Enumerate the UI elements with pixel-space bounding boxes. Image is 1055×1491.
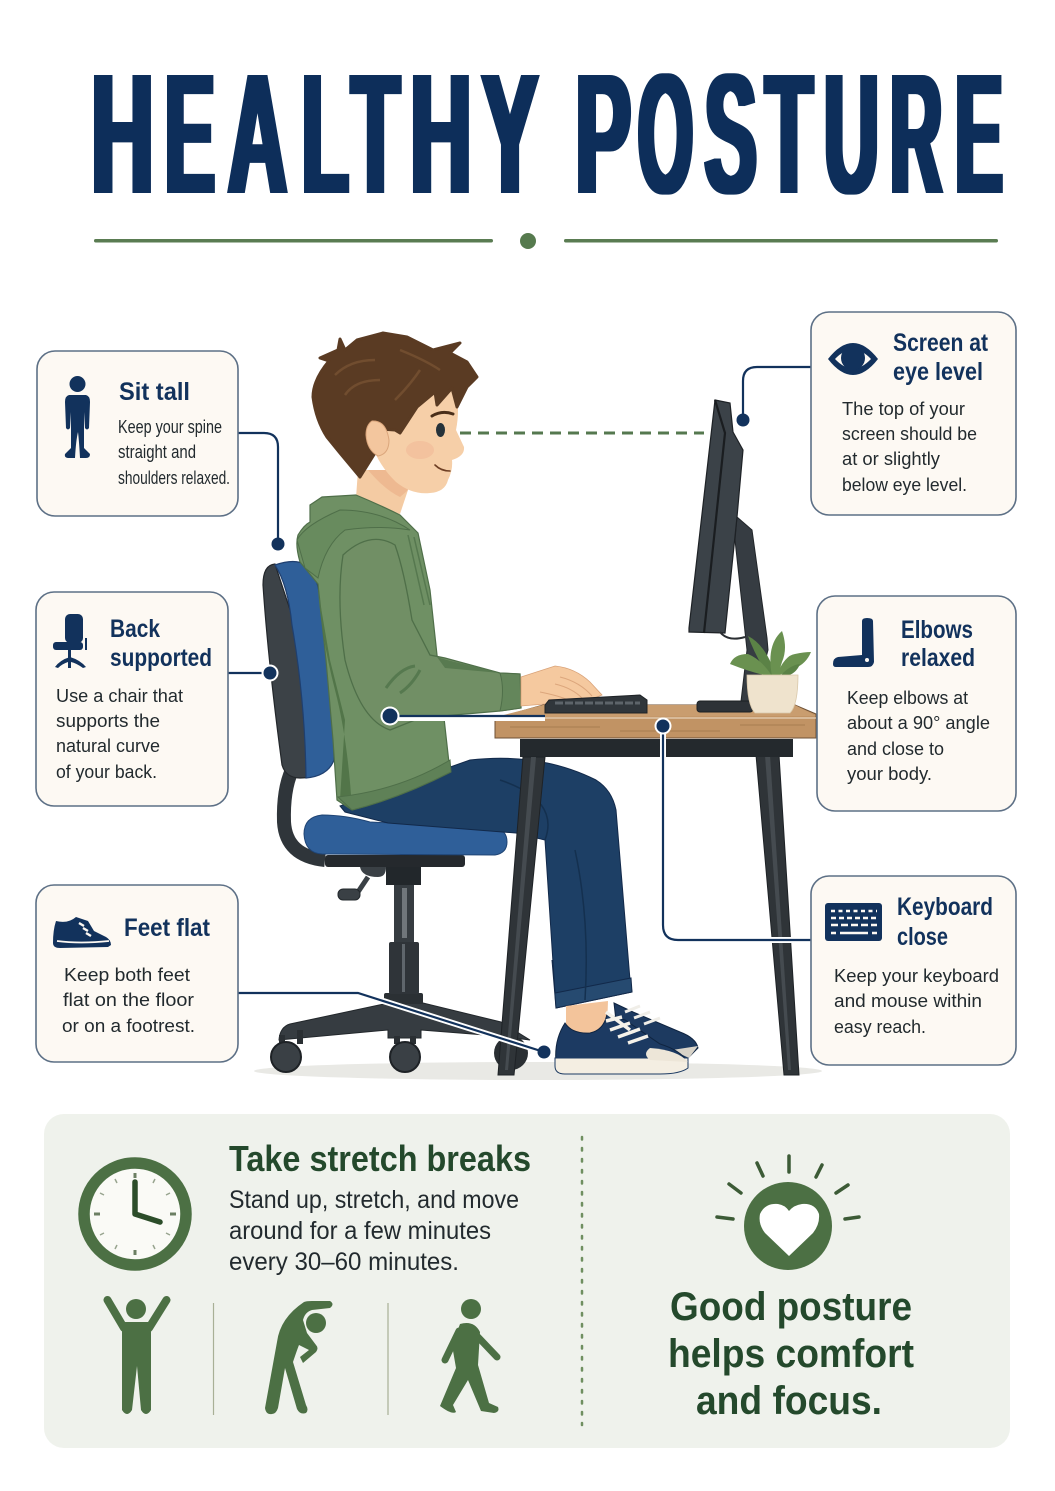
- icon: side stretch figure: [265, 1301, 332, 1414]
- connector: sit tall: [238, 433, 284, 550]
- panel: keyboard close: close: [897, 923, 948, 951]
- illustration: office chair: [263, 562, 530, 1072]
- desk apron: [520, 739, 793, 757]
- icon: heart with rays: [717, 1156, 859, 1270]
- panel: back supported: [36, 592, 228, 806]
- chair back bracket: [284, 770, 325, 860]
- hair: [313, 333, 477, 477]
- heading: Sit tall: [119, 378, 190, 406]
- title: L: [302, 39, 349, 230]
- panel: bottom band: [44, 1114, 1010, 1448]
- body text: [56, 686, 183, 782]
- body text: below eye level.: [842, 475, 967, 495]
- icon: office chair: [53, 614, 87, 668]
- face: [370, 385, 464, 493]
- body text: [229, 1186, 519, 1276]
- closing message: and focus.: [696, 1379, 882, 1423]
- body text: natural curve: [56, 736, 160, 756]
- chair back shell: [263, 564, 335, 778]
- title: [91, 39, 1003, 230]
- body text: every 30–60 minutes.: [229, 1248, 459, 1276]
- title: A: [228, 39, 287, 230]
- icon: bent elbow: [833, 618, 874, 667]
- hand: [521, 666, 602, 706]
- body text: Keep both feet: [64, 965, 190, 985]
- icon: arms raised figure: [108, 1299, 166, 1414]
- illustration: desk back and legs: [520, 739, 799, 1075]
- title: H: [91, 39, 154, 230]
- keyboard: [545, 695, 647, 713]
- eye level dashed line: [460, 432, 704, 434]
- heading: Keyboard: [897, 893, 993, 921]
- heading: Screen at: [893, 329, 989, 357]
- title: O: [638, 39, 693, 230]
- hoodie body: [297, 495, 451, 810]
- title: H: [410, 39, 472, 230]
- body text: straight and: [118, 442, 196, 462]
- far shoe: [614, 1003, 698, 1058]
- plant: [730, 631, 811, 713]
- hoodie sleeve: [340, 539, 521, 730]
- title: Y: [482, 39, 538, 230]
- body text: flat on the floor: [63, 990, 194, 1010]
- closing message: Good posture: [670, 1285, 912, 1329]
- body text: Keep your keyboard: [834, 966, 999, 986]
- icon: clock: [84, 1163, 186, 1265]
- illustration: person: [297, 333, 698, 1074]
- neck shadow: [368, 470, 420, 497]
- panel: screen at eye level: [811, 312, 1016, 515]
- monitor: [689, 400, 745, 639]
- divider: [214, 1303, 388, 1415]
- icon: shoe: [53, 917, 111, 948]
- chair back pad: [275, 562, 334, 778]
- floor shadow: [254, 1062, 822, 1080]
- body text: screen should be: [842, 424, 977, 444]
- panel: back supported: supported: [110, 644, 212, 672]
- body text: [847, 688, 990, 784]
- body text: [834, 966, 999, 1037]
- body text: of your back.: [56, 762, 157, 782]
- near shoe: [555, 1012, 688, 1074]
- panel: keyboard close: [811, 876, 1016, 1065]
- heading: Elbows: [901, 616, 973, 644]
- eye, brow and smile: [432, 412, 453, 471]
- body text: about a 90° angle: [847, 713, 990, 733]
- body text: Use a chair that: [56, 686, 183, 706]
- heading: take stretch breaks: Take stretch breaks: [229, 1138, 531, 1179]
- body text: and close to: [847, 739, 944, 759]
- jeans: [340, 758, 632, 1008]
- icon: standing person: [65, 376, 90, 458]
- panel: sit tall: [37, 351, 238, 516]
- desk top: [495, 705, 816, 738]
- heading: Back: [110, 615, 160, 643]
- illustration: desk top, monitor, keyboard, plant: [495, 400, 816, 1075]
- title: U: [824, 39, 879, 230]
- connector: feet flat: [238, 993, 550, 1058]
- body text: at or slightly: [842, 449, 940, 469]
- body text: and mouse within: [834, 991, 982, 1011]
- title: T: [351, 39, 400, 230]
- ear: [366, 421, 389, 456]
- ankle: [566, 1001, 608, 1040]
- body text: The top of your: [842, 399, 965, 419]
- panel: screen at eye level: eye level: [893, 358, 983, 386]
- icon: eye: [828, 343, 878, 375]
- connector: keyboard close: [654, 718, 811, 940]
- connector: back supported: [228, 664, 278, 682]
- dotted divider: [581, 1137, 583, 1425]
- connector: screen at eye level: [736, 367, 811, 426]
- connector: elbows relaxed: [380, 706, 545, 726]
- body text: around for a few minutes: [229, 1217, 491, 1245]
- title divider: [94, 233, 998, 249]
- neck: [356, 470, 424, 514]
- desk right leg: [756, 755, 799, 1075]
- body text: shoulders relaxed.: [118, 468, 230, 488]
- body text: or on a footrest.: [62, 1016, 195, 1036]
- cheek: [406, 441, 434, 459]
- body text: easy reach.: [834, 1017, 926, 1037]
- panel: feet flat: [36, 885, 238, 1062]
- seat lever: [338, 867, 386, 900]
- chair base: [271, 867, 530, 1072]
- icon: walking figure: [440, 1299, 498, 1413]
- title: T: [765, 39, 812, 230]
- body text: Keep your spine: [118, 417, 222, 437]
- body text: Stand up, stretch, and move: [229, 1186, 519, 1214]
- seat cushion: [304, 815, 507, 855]
- desk left leg: [498, 757, 545, 1075]
- title: R: [890, 39, 942, 230]
- panel: elbows relaxed: [817, 596, 1016, 811]
- closing message: helps comfort: [668, 1332, 914, 1376]
- body text: [118, 417, 230, 488]
- body text: [62, 965, 195, 1036]
- heading: Feet flat: [124, 914, 211, 942]
- title: S: [705, 39, 757, 230]
- body text: [842, 399, 977, 495]
- body text: your body.: [847, 764, 932, 784]
- body text: Keep elbows at: [847, 688, 968, 708]
- title: E: [165, 39, 215, 230]
- body text: supports the: [56, 711, 160, 731]
- panel: elbows relaxed: relaxed: [901, 644, 975, 672]
- title: P: [576, 39, 631, 230]
- closing message: [668, 1285, 914, 1423]
- monitor stand: [697, 517, 768, 712]
- icon: keyboard: [825, 903, 882, 941]
